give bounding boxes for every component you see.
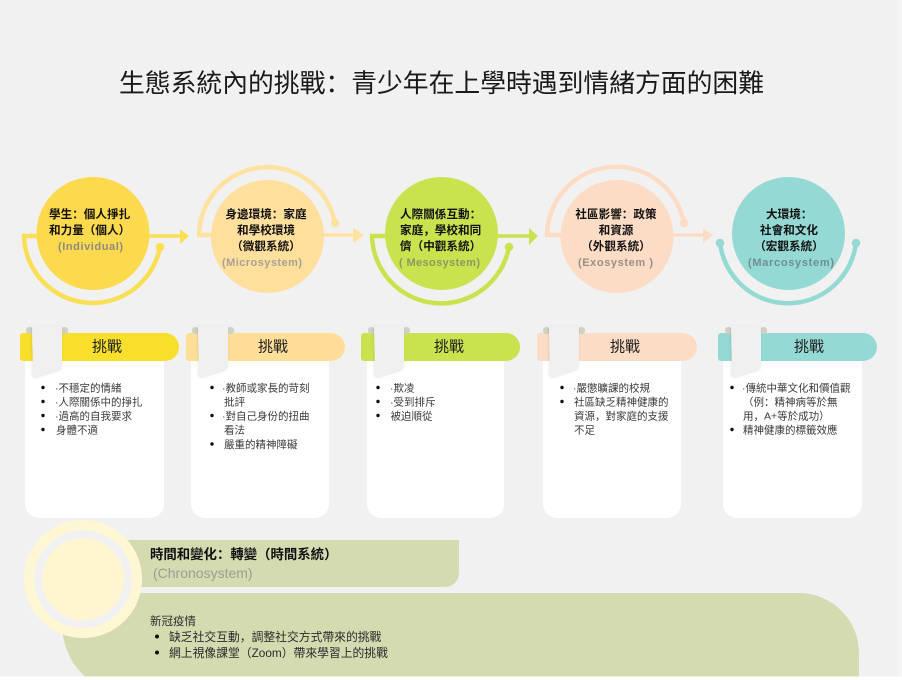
list: ·人際關係中的掙扎: [55, 396, 143, 408]
heading: mesosystem: 人際關係互動：: [400, 207, 481, 221]
panel: chronosystem detail: [62, 593, 859, 676]
heading: exosystem: 和資源: [599, 223, 634, 237]
heading: 時間和變化：轉變（時間系統）: [150, 546, 337, 562]
heading: exosystem: (Exosystem ): [578, 257, 653, 269]
folded tab: [368, 326, 410, 376]
heading: microsystem: (Microsystem): [222, 257, 302, 269]
header bar: [186, 333, 345, 361]
panel: chronosystem heading: [120, 540, 459, 587]
list: [376, 382, 436, 422]
heading: 挑戰: [258, 338, 288, 356]
header bar: [361, 333, 520, 361]
list: 身體不適: [56, 424, 98, 436]
list: ·過高的自我要求: [55, 410, 132, 422]
heading: 挑戰: [434, 338, 464, 356]
heading: mesosystem: ( Mesosystem): [399, 257, 480, 269]
heading: 挑戰: [794, 338, 824, 356]
arc and arrow: individual: [22, 229, 189, 303]
heading: individual: 學生：個人掙扎: [49, 207, 131, 221]
heading: macrosystem: 大環境：: [766, 207, 812, 221]
panel: challenge 4: [537, 326, 697, 518]
heading: macrosystem: [748, 207, 834, 269]
circle: exosystem: [560, 180, 674, 293]
title: 生態系統內的挑戰：青少年在上學時遇到情緒方面的困難: [119, 69, 764, 98]
circle: macrosystem: [732, 177, 845, 290]
list: [41, 382, 143, 436]
list: [730, 382, 851, 436]
circle: mesosystem: [385, 177, 498, 290]
list: 精神健康的標籤效應: [743, 424, 838, 436]
list: 社區缺乏精神健康的: [574, 396, 668, 408]
subheading: (Chronosystem): [153, 565, 253, 581]
arc and arrow: microsystem: [197, 167, 364, 243]
list: 資源，對家庭的支援: [574, 410, 669, 422]
heading: macrosystem: (Marcosystem): [748, 257, 834, 269]
panel: challenge 3: [361, 326, 520, 518]
heading: microsystem: 和學校環境: [237, 223, 295, 237]
stage 4: exosystem: [545, 167, 713, 293]
card body: [367, 350, 504, 518]
list: 被迫順從: [390, 410, 433, 422]
arc and arrow: exosystem: [545, 167, 713, 243]
heading: 挑戰: [610, 338, 640, 356]
folded tab: [192, 326, 234, 376]
heading: mesosystem: 家庭，學校和同: [400, 223, 481, 237]
heading: individual: 和力量（個人）: [49, 223, 130, 237]
detail text: 網上視像課堂（Zoom）帶來學習上的挑戰: [169, 646, 388, 660]
icon: chronosystem ring: [29, 525, 137, 633]
detail text: 缺乏社交互動，調整社交方式帶來的挑戰: [169, 630, 382, 644]
heading: exosystem: 社區影響：政策: [575, 207, 657, 221]
folded tab: [26, 326, 68, 376]
heading: individual: (Individual): [58, 241, 123, 253]
card body: [543, 350, 681, 518]
heading: 挑戰: [92, 338, 122, 356]
circle: individual: [36, 177, 150, 290]
heading background: [120, 540, 459, 587]
heading: mesosystem: 儕（中觀系統）: [400, 239, 481, 253]
heading: microsystem: [222, 207, 307, 269]
stage 1: individual: [22, 177, 189, 303]
heading: exosystem: [575, 207, 657, 269]
heading: individual: [49, 207, 131, 253]
arc: macrosystem: [718, 241, 858, 303]
list: [210, 382, 310, 451]
header bar: [537, 333, 697, 361]
circle: microsystem: [211, 180, 324, 293]
list: 批評: [224, 396, 245, 408]
list: ·受到排斥: [390, 396, 436, 408]
folded tab: [543, 326, 585, 376]
folded tab: [725, 326, 767, 376]
heading: microsystem: （微觀系統）: [231, 239, 301, 253]
card body: [723, 350, 862, 518]
stage 3: mesosystem: [370, 177, 538, 303]
list: ·嚴懲曠課的校規: [573, 382, 650, 394]
list: ·不穩定的情緒: [55, 382, 122, 394]
detail text: [150, 614, 388, 660]
header bar: [20, 333, 179, 361]
heading: macrosystem: （宏觀系統）: [754, 239, 824, 253]
heading: macrosystem: 社會和文化: [760, 223, 818, 237]
list: ·傳統中華文化和價值觀: [742, 382, 851, 394]
panel: challenge 2: [186, 326, 345, 518]
list: ·欺凌: [390, 382, 415, 394]
list: 用，A+等於成功）: [743, 410, 830, 422]
panel: challenge 1: [20, 326, 179, 518]
heading: microsystem: 身邊環境：家庭: [225, 207, 307, 221]
list: [560, 382, 669, 436]
arc and arrow: mesosystem: [370, 228, 538, 303]
detail text: 新冠疫情: [150, 614, 196, 628]
card body: [25, 350, 164, 518]
list: （例：精神病等於無: [743, 396, 838, 408]
stage 5: macrosystem: [718, 177, 858, 303]
list: 不足: [574, 424, 595, 436]
header bar: [718, 333, 877, 361]
detail background: [62, 593, 859, 676]
stage 2: microsystem: [197, 167, 364, 293]
heading: exosystem: （外觀系統）: [581, 239, 651, 253]
list: 嚴重的精神障礙: [224, 438, 298, 451]
list: 看法: [224, 424, 245, 436]
list: ·教師或家長的苛刻: [222, 382, 310, 394]
card body: [191, 350, 329, 518]
panel: challenge 5: [718, 326, 877, 518]
list: ·對自己身份的扭曲: [222, 410, 310, 422]
heading: mesosystem: [399, 207, 481, 269]
